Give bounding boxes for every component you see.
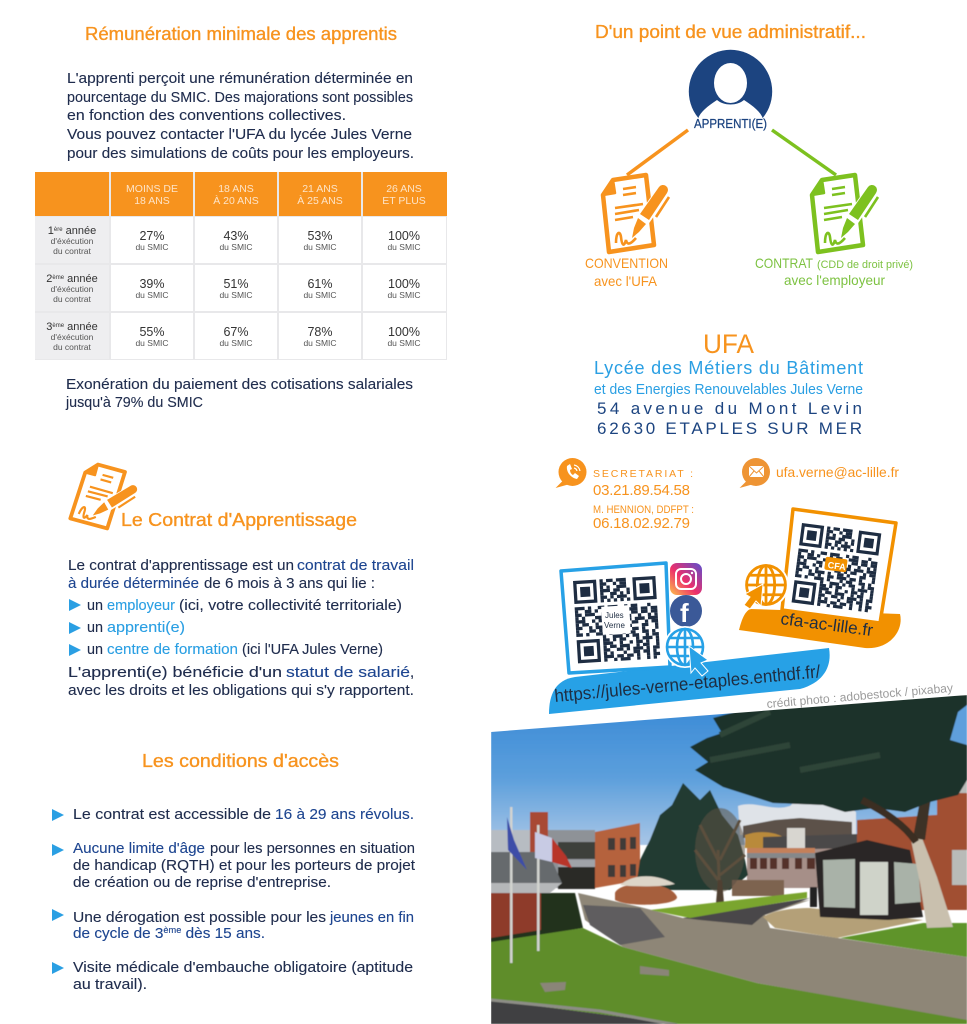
list item: dérogation: jeunes en fin: [329, 909, 414, 926]
list: parties au contrat: (ici, votre collectivité territoriale): [179, 597, 402, 614]
icon: contrat: [812, 175, 880, 252]
table: pourcentages du SMIC: 53%: [307, 229, 333, 243]
table: pourcentages du SMIC: 2: [46, 273, 52, 285]
text block: exonération: [65, 376, 413, 411]
table: pourcentages du SMIC: ET PLUS: [382, 195, 426, 207]
panel: contacts: [558, 458, 899, 532]
icon: téléphone: [558, 458, 586, 486]
list item: âge: [52, 806, 414, 823]
table: pourcentages du SMIC: du contrat: [53, 294, 92, 304]
text block: exonération: jusqu'à 79% du SMIC: [65, 394, 203, 411]
text: crédit photo: crédit photo : adobestock / pixabay: [766, 681, 954, 711]
QR code: cfa: [782, 509, 896, 623]
icon: convention: [603, 175, 671, 252]
label: convention: CONVENTION: [585, 255, 668, 271]
table: pourcentages du SMIC: [35, 172, 447, 360]
banner: cfa-ac-lille: [739, 609, 901, 648]
table: pourcentages du SMIC: d'éxécution: [51, 332, 94, 342]
table: pourcentages du SMIC: du SMIC: [135, 242, 169, 252]
heading: UFA: UFA: [703, 329, 754, 359]
table: pourcentages du SMIC: À 20 ANS: [213, 194, 259, 207]
table: pourcentages du SMIC: du contrat: [53, 246, 92, 256]
panel: conditions d'accès: [52, 751, 416, 993]
label: convention: [585, 255, 668, 289]
table: pourcentages du SMIC: du SMIC: [387, 290, 421, 300]
table: pourcentages du SMIC: du SMIC: [135, 290, 169, 300]
table: pourcentages du SMIC: du SMIC: [303, 338, 337, 348]
panel: site cfa-ac-lille: [739, 509, 901, 648]
label: contrat: CONTRAT: [755, 255, 813, 271]
table: pourcentages du SMIC: 39%: [139, 277, 165, 291]
list item: visite médicale: Visite médicale d'embauche obligatoire (aptitude: [73, 959, 413, 976]
table: pourcentages du SMIC: ème: [52, 323, 65, 329]
list: parties au contrat: centre de formation: [107, 641, 238, 658]
icon: globe orange: [744, 566, 785, 609]
text block: introduction: Vous pouvez contacter l'UFA du lycée Jules Verne: [67, 126, 412, 143]
list: parties au contrat: un: [87, 641, 103, 658]
text block: définition: de 6 mois à 3 ans qui lie :: [204, 575, 375, 592]
table: pourcentages du SMIC: 55%: [139, 325, 165, 339]
table: pourcentages du SMIC: 18 ANS: [218, 183, 254, 195]
text: nom du lycée: [594, 358, 863, 398]
table: pourcentages du SMIC: d'éxécution: [51, 236, 94, 246]
text: adresse: [597, 399, 862, 438]
table: pourcentages du SMIC: du SMIC: [303, 290, 337, 300]
table: pourcentages du SMIC: d'éxécution: [51, 284, 94, 294]
list: parties au contrat: employeur: [107, 597, 175, 614]
table: pourcentages du SMIC: année: [64, 321, 98, 333]
panel: rémunération minimale: [35, 24, 447, 411]
table: pourcentages du SMIC: année: [64, 273, 98, 285]
icon: contrat signé: [66, 457, 144, 540]
table: pourcentages du SMIC: 18 ANS: [134, 195, 170, 207]
panel: le contrat d'apprentissage: [66, 457, 414, 699]
list item: dérogation: Une dérogation est possible pour les: [73, 909, 326, 926]
list item: handicap: de création ou de reprise d'entreprise.: [73, 874, 331, 891]
list item: handicap: pour les personnes en situation: [210, 840, 415, 857]
arrow: lien contrat: [772, 130, 836, 175]
table: pourcentages du SMIC: 78%: [307, 325, 333, 339]
text: secrétariat: 03.21.89.54.58: [593, 482, 690, 499]
text: cfa-ac-lille.fr: cfa-ac-lille.fr: [779, 609, 875, 640]
table: pourcentages du SMIC: du SMIC: [387, 242, 421, 252]
text: adresse: 62630 ETAPLES SUR MER: [597, 419, 862, 438]
table: pourcentages du SMIC: du SMIC: [387, 338, 421, 348]
text block: introduction: [67, 70, 414, 162]
text block: définition: à durée déterminée: [68, 575, 199, 592]
icon: facebook: [670, 595, 702, 628]
table: pourcentages du SMIC: 61%: [307, 277, 333, 291]
text block: introduction: pourcentage du SMIC. Des majorations sont possibles: [67, 89, 413, 106]
heading: le contrat: Le Contrat d'Apprentissage: [121, 510, 357, 530]
table: pourcentages du SMIC: du SMIC: [303, 242, 337, 252]
list item: handicap: [52, 840, 416, 891]
table: pourcentages du SMIC: 1: [48, 225, 54, 237]
list item: handicap: de handicap (RQTH) et pour les porteurs de projet: [73, 857, 416, 874]
text block: définition: [68, 557, 414, 592]
list item: dérogation: [52, 909, 414, 942]
text block: statut de salarié: statut de salarié: [286, 664, 410, 681]
table: pourcentages du SMIC: 43%: [223, 229, 249, 243]
table: pourcentages du SMIC: MOINS DE: [126, 183, 178, 195]
panel: adresse UFA: [594, 329, 863, 438]
text block: définition: Le contrat d'apprentissage est un: [68, 557, 294, 574]
table: pourcentages du SMIC: du SMIC: [219, 242, 253, 252]
text block: introduction: pour des simulations de coûts pour les employeurs.: [67, 145, 414, 162]
list item: visite médicale: [52, 959, 413, 993]
table: pourcentages du SMIC: ème: [52, 275, 65, 281]
list: parties au contrat: [69, 597, 402, 658]
label: convention: avec l'UFA: [594, 273, 658, 289]
table: pourcentages du SMIC: À 25 ANS: [297, 194, 343, 207]
table: pourcentages du SMIC: du contrat: [53, 342, 92, 352]
table: pourcentages du SMIC: du SMIC: [219, 338, 253, 348]
list: parties au contrat: apprenti(e): [107, 619, 185, 636]
table: pourcentages du SMIC: 100%: [388, 229, 420, 243]
text: adresse: 54 avenue du Mont Levin: [597, 399, 862, 418]
text block: statut de salarié: avec les droits et les obligations qui s'y rapportent.: [68, 682, 414, 699]
text block: introduction: L'apprenti perçoit une rémunération déterminée en: [67, 70, 413, 87]
text block: statut de salarié: ,: [410, 664, 414, 681]
banner: site web: [549, 648, 830, 714]
table: pourcentages du SMIC: 3: [46, 321, 52, 333]
text: url du site: https://jules-verne-etaples.enthdf.fr/: [554, 661, 821, 706]
table: pourcentages du SMIC: 100%: [388, 277, 420, 291]
icon: apprenti(e) avatar: [686, 50, 775, 140]
QR code: cfa: CFA: [827, 560, 847, 572]
text block: introduction: en fonction des conventions collectives.: [67, 107, 346, 124]
list item: âge: 16 à 29 ans révolus.: [275, 806, 414, 823]
text: courriel: ufa.verne@ac-lille.fr: [776, 464, 899, 480]
text block: statut de salarié: [68, 664, 414, 699]
list: parties au contrat: (ici l'UFA Jules Verne): [242, 641, 383, 658]
heading: rémunération: Rémunération minimale des apprentis: [85, 24, 397, 44]
text: secrétariat: M. HENNION, DDFPT :: [593, 504, 694, 516]
list item: dérogation: ème: [163, 925, 181, 935]
table: pourcentages du SMIC: du SMIC: [135, 338, 169, 348]
list item: dérogation: de cycle de 3: [73, 925, 161, 942]
text: secrétariat: [593, 468, 694, 532]
table: pourcentages du SMIC: du SMIC: [219, 290, 253, 300]
table: pourcentages du SMIC: 51%: [223, 277, 249, 291]
list item: âge: Le contrat est accessible de: [73, 806, 271, 823]
QR code: Jules Verne: Jules: [605, 611, 624, 620]
table: pourcentages du SMIC: 21 ANS: [302, 183, 338, 195]
table: pourcentages du SMIC: année: [63, 225, 96, 237]
label: contrat: [755, 255, 913, 288]
QR code: Jules Verne: Verne: [604, 621, 625, 630]
text: nom du lycée: et des Energies Renouvelables Jules Verne: [594, 382, 863, 398]
heading: administratif: D'un point de vue administratif...: [595, 22, 866, 42]
panel: site Jules Verne: [549, 563, 830, 714]
text: secrétariat: SECRETARIAT :: [593, 468, 693, 480]
list item: dérogation: dès 15 ans.: [181, 925, 265, 942]
list: parties au contrat: un: [87, 597, 103, 614]
table: pourcentages du SMIC: ère: [54, 227, 63, 233]
text block: exonération: Exonération du paiement des cotisations salariales: [66, 376, 413, 393]
table: pourcentages du SMIC: 100%: [388, 325, 420, 339]
list item: handicap: Aucune limite d'âge: [73, 840, 205, 857]
list: parties au contrat: un: [87, 619, 103, 636]
table: pourcentages du SMIC: 27%: [139, 229, 165, 243]
text block: statut de salarié: L'apprenti(e) bénéficie d'un: [68, 664, 282, 681]
photo: lycée Jules Verne: [491, 695, 967, 1024]
label: contrat: (CDD de droit privé): [817, 259, 913, 271]
list item: visite médicale: au travail).: [73, 976, 147, 993]
icon: instagram: [670, 563, 702, 595]
QR code: Jules Verne: [561, 563, 670, 673]
heading: conditions: Les conditions d'accès: [142, 751, 339, 771]
label: contrat: avec l'employeur: [784, 272, 885, 288]
table: pourcentages du SMIC: 67%: [223, 325, 249, 339]
icon: apprenti(e) avatar: APPRENTI(E): [694, 117, 767, 131]
icon: facebook: f: [680, 598, 689, 628]
panel: point de vue administratif: [585, 22, 913, 289]
icon: globe bleu: [667, 629, 708, 676]
text: secrétariat: 06.18.02.92.79: [593, 515, 690, 532]
icon: courriel: [742, 458, 770, 486]
arrow: lien convention: [627, 130, 688, 175]
table: pourcentages du SMIC: 26 ANS: [386, 183, 422, 195]
text block: définition: contrat de travail: [297, 557, 414, 574]
text: nom du lycée: Lycée des Métiers du Bâtiment: [594, 358, 863, 378]
